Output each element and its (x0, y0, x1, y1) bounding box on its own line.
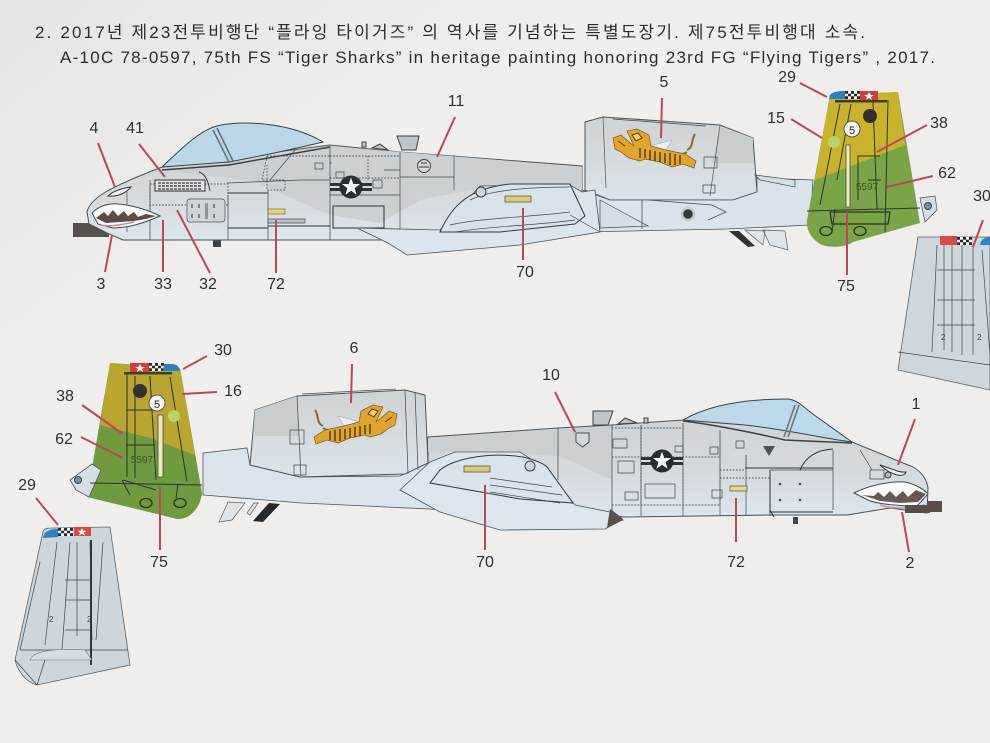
callout numbers: 62 (55, 431, 73, 448)
wing and engine pod (357, 184, 600, 255)
partial tail at right edge: 2 (977, 333, 982, 342)
vertical tail: colored (70, 363, 202, 519)
nose eye (108, 187, 131, 196)
fuselage insignia (330, 176, 372, 198)
lower-left gray tail: 2 (49, 615, 54, 624)
vertical tail: colored (807, 91, 920, 247)
decal 75 pale stripe (846, 145, 850, 207)
tail boom (203, 437, 623, 520)
decal 41 stencil block (155, 172, 210, 191)
antenna and dorsal details (593, 411, 648, 425)
decal 72 yellow stripe (730, 486, 747, 491)
tail fin stripes: red, checks, blue (124, 363, 180, 374)
callout numbers: 41 (126, 120, 144, 137)
tail green emblem (828, 136, 840, 148)
tail panel lines (90, 372, 202, 498)
callout numbers: 5 (660, 74, 669, 91)
fuselage body (428, 420, 928, 517)
gun barrel (905, 501, 942, 512)
vertical tail: colored: 5 (849, 125, 855, 137)
fuselage insignia (641, 450, 683, 472)
panel lines (127, 146, 454, 240)
vertical tail: colored: 5 (154, 399, 160, 411)
darker camouflage upper band (170, 146, 582, 223)
decal 70 yellow stripe (464, 466, 490, 472)
tiger decal 6 (314, 405, 397, 444)
lower-left gray tail (15, 527, 130, 685)
callout numbers: 32 (199, 276, 217, 293)
underside details (213, 238, 370, 247)
heading: Korean and English caption (35, 23, 935, 67)
black ventral strake (729, 231, 755, 247)
callout numbers: 62 (938, 165, 956, 182)
callout numbers: 11 (448, 93, 464, 110)
callout numbers: 75 (837, 278, 855, 295)
wing and engine pod (400, 452, 623, 530)
small details on fuselage (315, 163, 400, 188)
canopy (683, 399, 852, 443)
tail number 5 disc (149, 395, 165, 411)
lower-left gray tail: 2 (87, 615, 92, 624)
aircraft: right side view (70, 363, 942, 530)
antenna and dorsal details (362, 136, 419, 150)
callout numbers: 16 (224, 383, 242, 400)
engine nacelle (585, 117, 757, 200)
heading line: Korean: 2. 2017년 제23전투비행단 “플라잉 타이거즈” 의 역사를 기념하는 특별도장기. 제75전투비행대 소속. (35, 23, 865, 42)
tiger decal 5 (613, 129, 696, 168)
tail fin stripes: blue, checks, red (829, 91, 887, 102)
callout numbers: 38 (56, 388, 74, 405)
tail boom (582, 175, 937, 232)
ellipse hinges (140, 498, 186, 508)
gear door and nose panels (228, 193, 384, 228)
canopy (162, 123, 330, 170)
rivets in ammo panel (779, 483, 801, 501)
callout numbers: 4 (90, 120, 99, 137)
callout numbers: 38 (930, 115, 948, 132)
decal 70 yellow stripe (505, 196, 531, 202)
gun barrel (73, 223, 109, 237)
small hatches (613, 439, 884, 500)
tail green emblem (168, 410, 180, 422)
tailplane dark ventral strakes (745, 230, 788, 250)
leader lines (98, 83, 983, 275)
decal 75 pale stripe (158, 415, 163, 477)
darker camouflage band (428, 426, 612, 480)
tail number 5 disc (844, 121, 860, 137)
shark mouth (854, 482, 930, 513)
serial number: 5597 (856, 182, 879, 193)
ellipse hinges (820, 212, 890, 236)
callout numbers: 33 (154, 276, 172, 293)
callout numbers: 3 (97, 276, 106, 293)
callout numbers: 2 (906, 555, 915, 572)
aircraft: left side view (73, 91, 937, 255)
riveted access panels (150, 156, 400, 222)
squadron crest decal 11 (418, 160, 430, 172)
tail dark round emblem (863, 109, 877, 123)
callout numbers: 15 (767, 110, 785, 127)
callout numbers: 75 (150, 554, 168, 571)
callout numbers: 10 (542, 367, 560, 384)
heading line: English: A-10C 78-0597, 75th FS “Tiger Sharks” in heritage painting honoring 23rd FG “Flying Tigers” , 2017. (60, 48, 935, 67)
nose panel with vents (187, 199, 225, 222)
shark mouth (92, 204, 160, 228)
nose eye (880, 465, 906, 475)
leader lines (36, 356, 915, 552)
callout numbers (90, 69, 990, 295)
callouts: lower aircraft (18, 340, 921, 572)
partial tail at right edge (898, 236, 990, 390)
squadron crest decal 10 (576, 433, 589, 447)
triangular marking (763, 446, 775, 456)
callout numbers: 30 (214, 342, 232, 359)
callouts: upper aircraft (90, 69, 990, 295)
decal 72 yellow stripe (268, 209, 285, 214)
serial number: 5597 (131, 455, 154, 466)
riveted panels (612, 425, 770, 505)
fuselage body (87, 145, 582, 240)
callout numbers: 72 (727, 554, 745, 571)
black ventral strake (253, 503, 280, 522)
callout numbers: 6 (350, 340, 359, 357)
panel lines (558, 423, 872, 516)
callout numbers: 72 (267, 276, 285, 293)
callout numbers: 70 (476, 554, 494, 571)
callout numbers: 70 (516, 264, 534, 281)
decal stencil rectangle (268, 219, 305, 223)
tail dark round emblem (133, 384, 147, 398)
tail panel lines (807, 100, 920, 232)
callout numbers (18, 340, 921, 572)
ventral strakes (219, 502, 258, 522)
partial tail at right edge: 2 (941, 333, 946, 342)
nose gear bump (793, 517, 798, 524)
callout numbers: 29 (18, 477, 36, 494)
callout numbers: 1 (912, 396, 921, 413)
engine nacelle (250, 389, 428, 477)
callout numbers: 29 (778, 69, 796, 86)
